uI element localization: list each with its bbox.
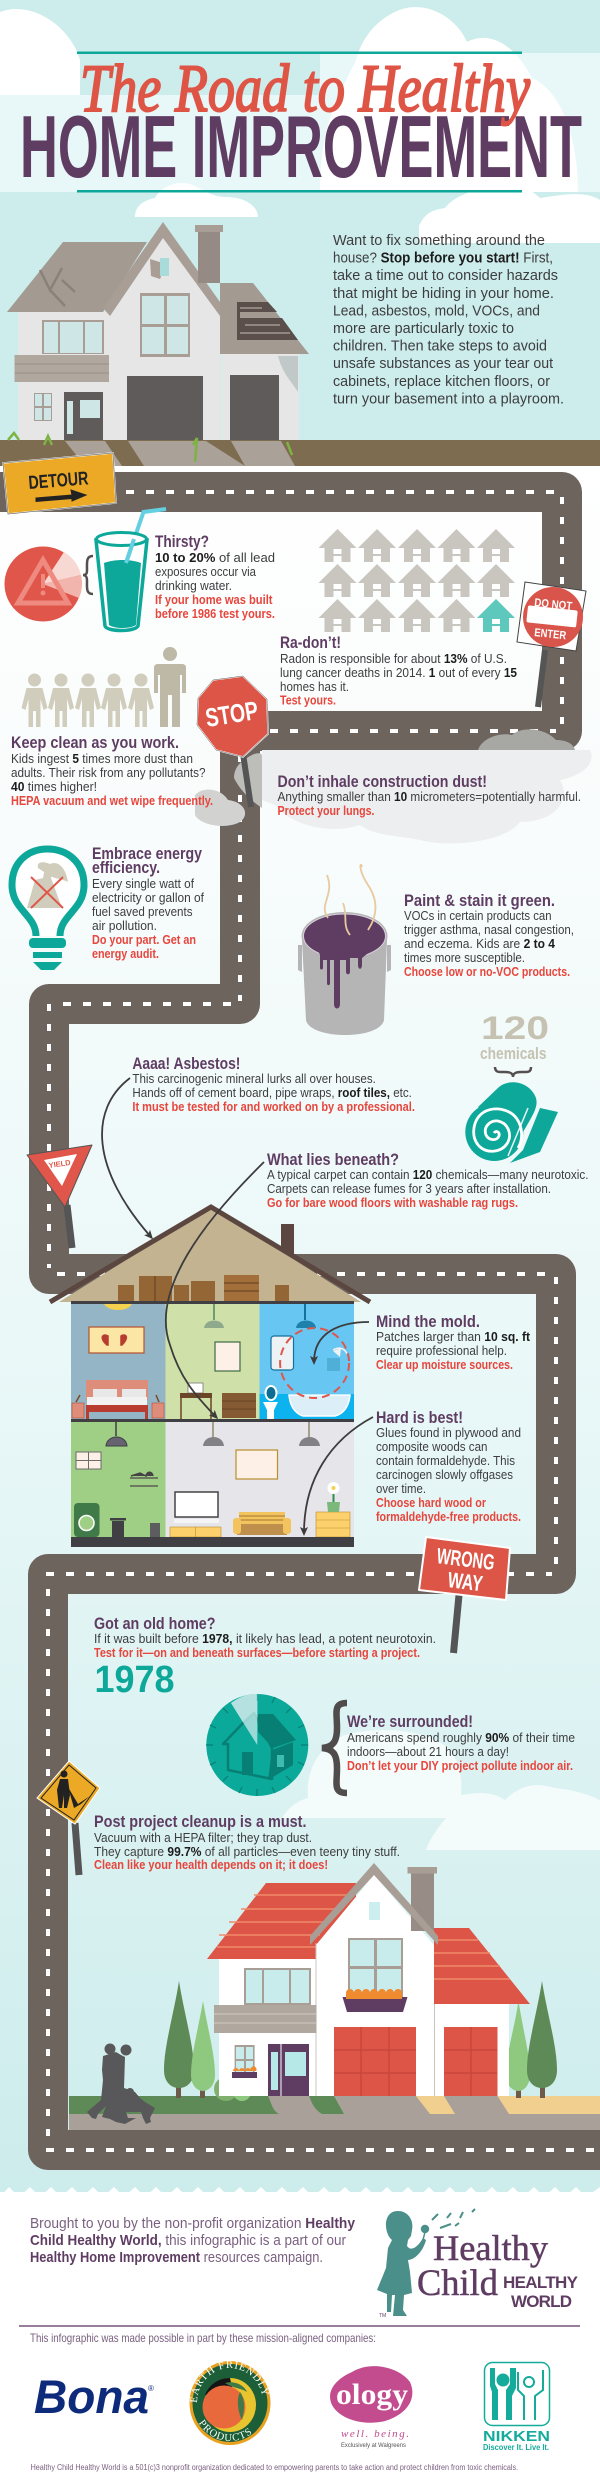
text block: Keep clean: adults. Their risk from any pollutants? [11,765,206,780]
text block: carpet: Go for bare wood floors with washable rag rugs. [267,1195,518,1210]
text block: old home: Got an old home? [94,1615,216,1633]
text block: Keep clean: Keep clean as you work. [11,734,179,752]
text block: Keep clean: HEPA vacuum and wet wipe frequently. [11,793,213,808]
clouds behind title [0,7,600,243]
icon: clock pie with house [206,1694,308,1796]
stop sign [197,676,268,807]
text block: Radon: lung cancer deaths in 2014. 1 out of every 15 [280,665,517,680]
text block: surrounded: Americans spend roughly 90% of their time [347,1730,575,1745]
text block: mold: Mind the mold. [376,1313,480,1331]
text block: hard is best: Hard is best! [376,1409,463,1427]
text block: paint: trigger asthma, nasal congestion, [404,922,574,937]
text block: Keep clean: 40 times higher! [11,779,97,794]
gable trim [310,1863,438,1945]
text block: hard is best: formaldehyde-free products. [376,1509,521,1524]
text block: construction dust: Don’t inhale construction dust! [278,773,487,791]
logo: Earth Friendly Products [190,2361,270,2445]
text block: Radon: Test yours. [280,692,336,708]
text block: cleanup: Post project cleanup is a must. [94,1813,306,1831]
text block: carpet: A typical carpet can contain 120 chemicals—many neurotoxic. [267,1167,588,1182]
stat: 120 chemicals [480,1010,549,1063]
text block: Thirsty: 10 to 20% of all lead [155,550,275,565]
icon: lead pie chart [4,546,82,622]
icon: carpet roll [465,1082,558,1163]
brace: surrounded [322,1703,347,1793]
text block: sponsors intro: Brought to you by the non-profit organization Healthy [30,2215,356,2232]
text block: asbestos: It must be tested for and worked on by a professional. [132,1099,415,1114]
text block: hard is best: over time. [376,1481,426,1496]
text block: asbestos: Hands off of cement board, pipe wraps, roof tiles, etc. [132,1085,412,1100]
left roof [207,1883,356,1959]
intro text block: Lead, asbestos, mold, VOCs, and [333,302,540,319]
logo: Nikken: NIKKEN [483,2428,550,2445]
logo: Healthy Child Healthy World [377,2209,579,2319]
text block: cleanup: Clean like your health depends on it; it does! [94,1857,328,1872]
intro text block: children. Then take steps to avoid [333,338,547,355]
icon: paint can [298,865,391,1035]
balcony [214,2005,316,2033]
text block: Radon: Radon is responsible for about 13% of U.S. [280,651,507,666]
clouds lower [282,1730,600,1850]
text block: mold [376,1313,531,1372]
stat: 1978: 1978 [94,1659,174,1701]
icon: kids and adult figures [22,647,186,727]
text block: Keep clean: Kids ingest 5 times more dust than [11,751,193,766]
text block: asbestos: This carcinogenic mineral lurks all over houses. [132,1071,376,1086]
arrow: asbestos to roof [102,1078,151,1237]
brace: lead [83,556,93,594]
logo: Healthy Child Healthy World: TM [379,2313,386,2319]
arrow: carpet to office floor [166,1162,264,1417]
room: laundry [71,1422,166,1537]
text block: cleanup: They capture 99.7% of all particles—even teeny tiny stuff. [94,1844,400,1859]
text block: energy efficiency: electricity or gallon of [92,890,204,905]
wrong way sign: WRONG [435,1543,496,1575]
yield sign [27,1145,92,1248]
ground strip [0,440,600,466]
stat: 120 chemicals: chemicals [480,1044,546,1063]
text block: Thirsty: exposures occur via [155,564,257,579]
do not enter sign [517,582,586,707]
text block: Radon: Ra-don’t! [280,634,341,652]
text block: carpet: What lies beneath? [267,1151,399,1169]
intro text block: cabinets, replace kitchen floors, or [333,373,550,390]
front door [268,2044,309,2096]
illustration: repaired house and yard [69,1863,600,2130]
lawn and sidewalk [69,2096,600,2130]
arrow: mold to bathroom [314,1322,369,1362]
detour sign: DETOUR [28,468,89,494]
right roof [434,1928,530,2004]
logo: ology: Exclusively at Walgreens [341,2442,407,2449]
center window [348,1938,403,1998]
text block: Thirsty: If your home was built [155,592,273,607]
text block: cleanup [94,1813,400,1872]
upper floor slab [71,1301,354,1304]
divider [19,2325,580,2327]
logo: Nikken: Discover It. Live It. [483,2442,549,2452]
small window [235,2045,255,2073]
illustration: damaged house [7,222,309,462]
logo: Healthy Child Healthy World: Healthy [433,2228,548,2268]
text block: sponsors intro [30,2215,356,2266]
icon: radon houses grid [318,529,515,632]
intro text block: unsafe substances as your tear out [333,355,554,372]
text block: energy efficiency: Embrace energy [92,845,203,863]
text block: old home: Test for it—on and beneath surfaces—before starting a project. [94,1645,420,1660]
left window [244,1968,311,2005]
text block: asbestos [132,1055,415,1114]
yield sign: YIELD [48,1158,72,1170]
text block: old home: If it was built before 1978, it likely has lead, a potent neurotoxin. [94,1631,436,1646]
text block: Thirsty: Thirsty? [155,533,209,551]
text block: hard is best [376,1409,521,1524]
intro text block: that might be hiding in your home. [333,285,554,302]
logo: ology: ology [336,2378,408,2411]
text block: energy efficiency: efficiency. [92,859,160,877]
do not enter sign: DO NOT [534,597,573,613]
text block: Thirsty: drinking water. [155,578,232,593]
chimney [411,1873,434,1931]
text block: paint: VOCs in certain products can [404,908,552,923]
chimney [281,1224,294,1258]
text block: old home [94,1615,436,1660]
text block: mold: require professional help. [376,1343,507,1358]
text block: mold: Clear up moisture sources. [376,1357,513,1372]
text block: carpet: Carpets can release fumes for 3 years after installation. [267,1181,551,1196]
family silhouette [87,2044,155,2124]
do not enter sign: ENTER [534,627,567,642]
stop sign: STOP [203,695,260,733]
text block: construction dust: Protect your lungs. [278,803,374,818]
walls [219,1875,509,2096]
logo: Healthy Child Healthy World: WORLD [511,2292,572,2311]
room: bathroom [260,1304,354,1419]
text: mission-aligned companies: This infographic was made possible in part by these mission-aligned companies: [30,2331,376,2345]
trees and bushes [164,1981,557,2101]
base slab [71,1537,354,1547]
garage doors [334,2027,498,2096]
logo: ology [330,2366,412,2449]
zigzag section edge [0,2187,600,2483]
winding road [0,492,600,2150]
text block: surrounded [347,1713,575,1773]
text block: sponsors intro: Child Healthy World, this infographic is a part of our [30,2232,346,2249]
text block: Radon [280,634,517,708]
text block: carpet [267,1151,588,1210]
text block: surrounded: We’re surrounded! [347,1713,473,1731]
text block: asbestos: Aaaa! Asbestos! [132,1055,240,1073]
logo: ology: well. being. [341,2428,409,2440]
intro text block [333,232,564,407]
text block: energy efficiency: Do your part. Get an [92,932,196,947]
logo: Earth Friendly Products: EARTH FRIENDLY [190,2361,270,2403]
text block: energy efficiency: air pollution. [92,918,157,933]
arrow: hard wood to living room [304,1417,373,1533]
text block: Thirsty: before 1986 test yours. [155,606,275,621]
text block: hard is best: composite woods can [376,1439,488,1454]
detour sign [3,453,116,514]
illustration: cutaway house [50,1207,370,1547]
text block: Thirsty [155,533,275,621]
mid floor slab [71,1419,354,1422]
wrong way sign [419,1537,510,1653]
text block: energy efficiency: fuel saved prevents [92,904,193,919]
attic and roof [50,1207,370,1302]
icon: glass of water [96,509,166,630]
text block: hard is best: contain formaldehyde. This [376,1453,515,1468]
footer note: Healthy Child Healthy World is a 501(c)3 nonprofit organization dedicated to empowering parents to take action and protect children from toxic chemicals. [31,2463,518,2472]
text block: construction dust [278,773,581,818]
room: bedroom [71,1304,166,1419]
text block: paint: and eczema. Kids are 2 to 4 [404,936,556,951]
brace: chemicals [495,1067,531,1077]
logo: Bona: Bona [34,2370,149,2423]
logo: Bona: ® [148,2384,154,2393]
text block: construction dust: Anything smaller than 10 micrometers=potentially harmful. [278,789,581,804]
intro text block: Want to fix something around the [333,232,545,249]
intro text block: house? Stop before you start! First, [333,250,553,267]
text block: sponsors intro: Healthy Home Improvement resources campaign. [30,2249,323,2266]
logo: Healthy Child Healthy World: HEALTHY [503,2273,579,2292]
stat: 120 chemicals: 120 [481,1010,549,1046]
logo: Nikken [483,2362,550,2452]
intro text block: more are particularly toxic to [333,320,514,337]
title rule top [77,52,522,54]
text block: energy efficiency [92,845,204,961]
text block: paint: Paint & stain it green. [404,892,555,910]
text block: hard is best: Choose hard wood or [376,1495,486,1510]
text block: paint: times more susceptible. [404,950,525,965]
intro text block: take a time out to consider hazards [333,267,558,284]
text block: hard is best: Glues found in plywood and [376,1425,521,1440]
text block: paint [404,892,574,979]
text block: energy efficiency: energy audit. [92,946,159,961]
logo: Earth Friendly Products: PRODUCTS [198,2419,252,2442]
room: living room [166,1422,354,1537]
smoke: construction dust [195,729,592,843]
text block: Radon: homes has it. [280,679,349,694]
icon: light bulb with factory [12,849,84,970]
text block: hard is best: carcinogen slowly offgases [376,1467,513,1482]
construction sign [37,1761,100,1875]
title rule bottom [77,190,522,192]
text block: energy efficiency: Every single watt of [92,876,194,891]
text block: cleanup: Vacuum with a HEPA filter; they trap dust. [94,1830,312,1845]
flower box [342,1989,408,2012]
text block: surrounded: indoors—about 21 hours a day! [347,1744,509,1759]
intro text block: turn your basement into a playroom. [333,390,564,407]
room: office [166,1304,260,1419]
logo: Healthy Child Healthy World: Child [417,2263,498,2304]
text block: Keep clean [11,734,213,808]
text block: mold: Patches larger than 10 sq. ft [376,1329,531,1344]
wrong way sign: WAY [446,1567,484,1596]
